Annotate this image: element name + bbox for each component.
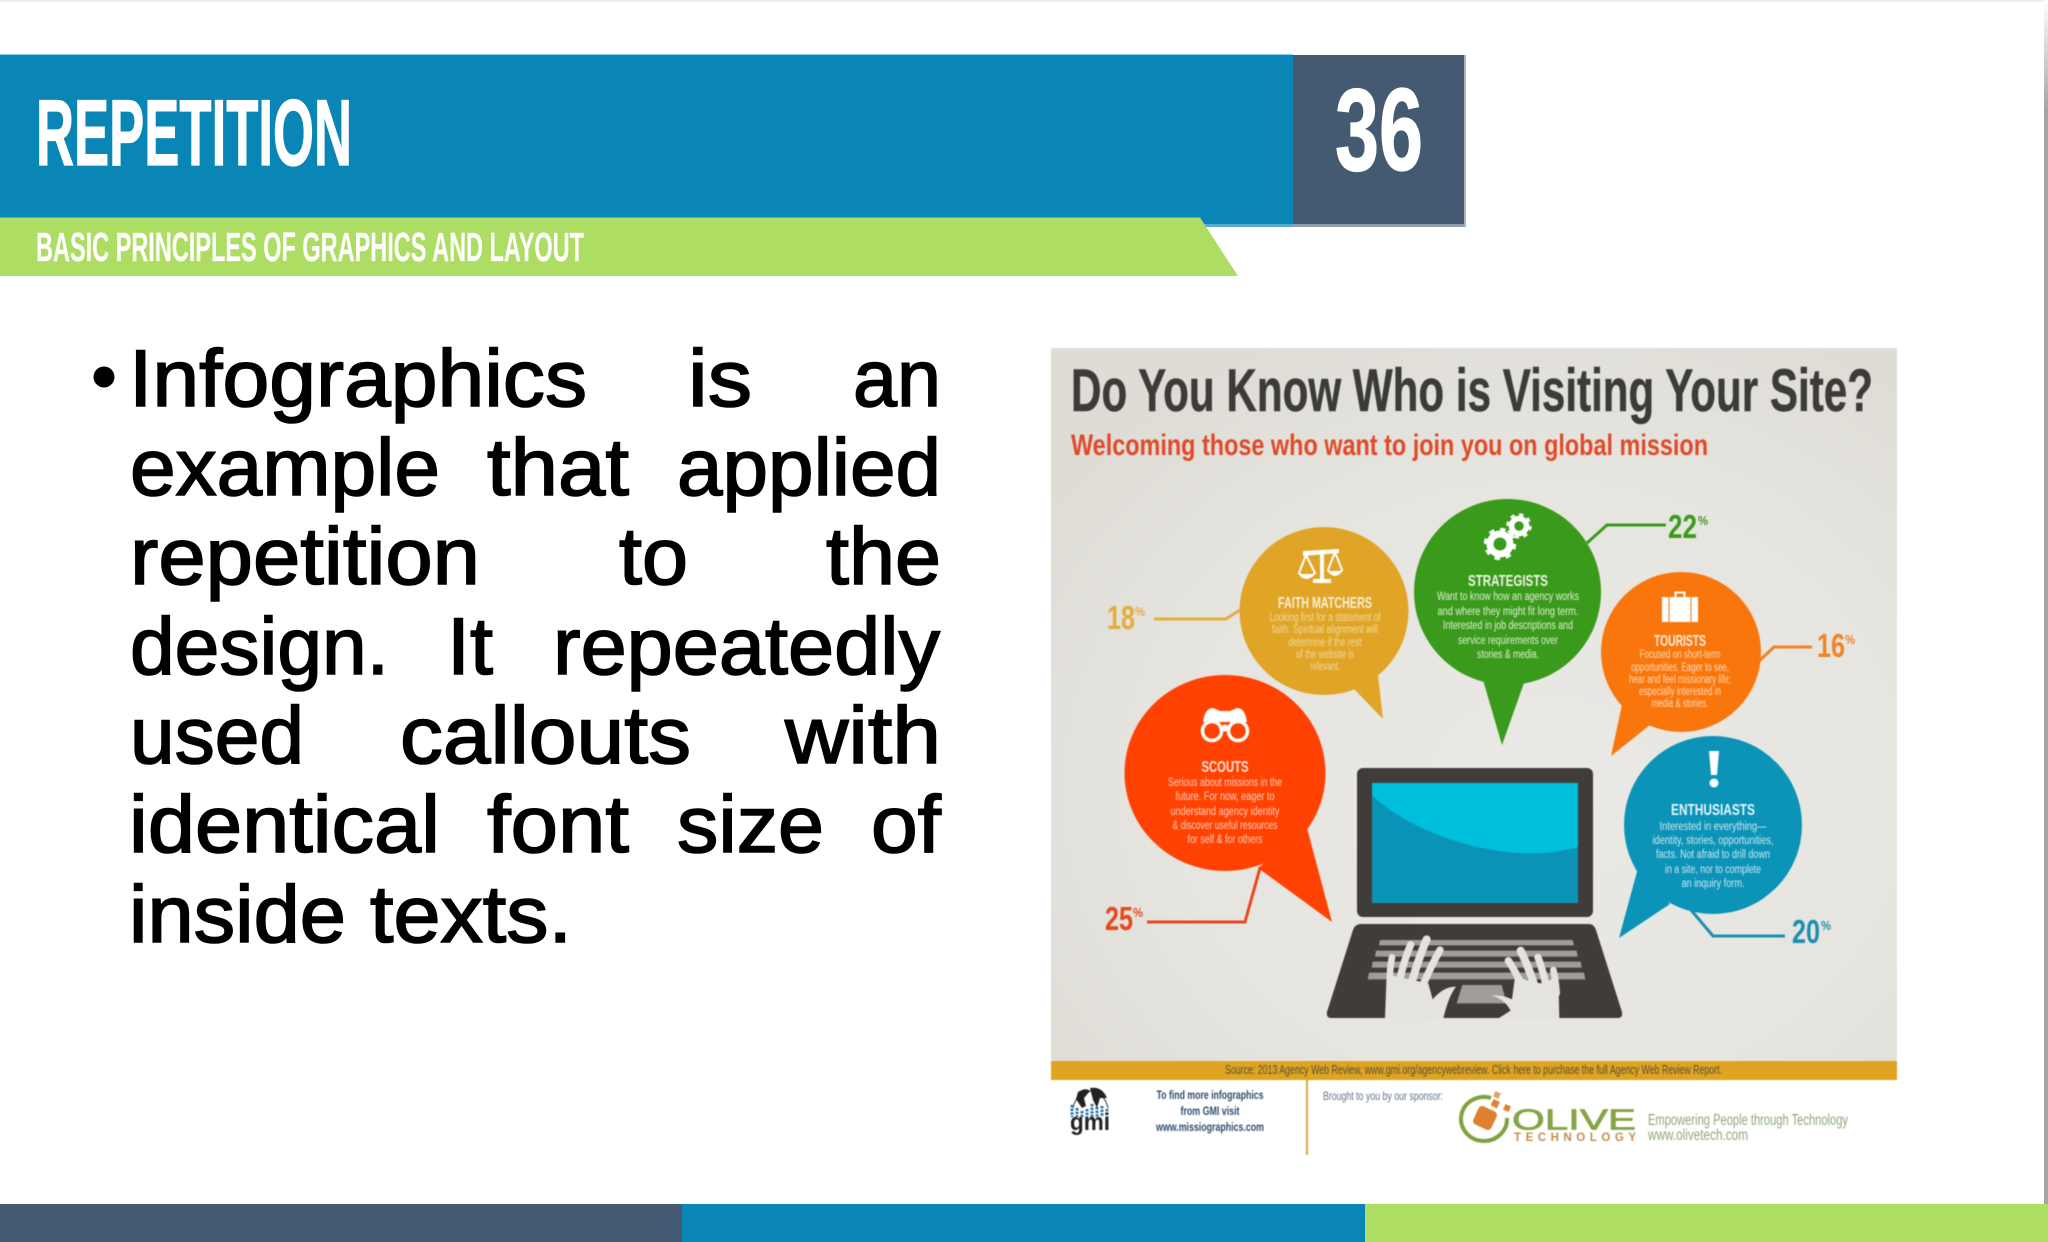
callout: tourists: opportunities. Eager to see, [1631, 662, 1729, 674]
body text bullet: applied [677, 423, 941, 513]
callout: scouts: future. For now, eager to [1176, 791, 1274, 803]
header banner [0, 54, 1466, 227]
body text bullet: It [447, 602, 493, 692]
body text bullet [94, 334, 942, 960]
body text bullet: texts. [370, 870, 572, 960]
logo: gmi: gmi [1070, 1109, 1110, 1136]
callout: scouts: SCOUTS [1202, 759, 1249, 776]
callout: strategists: 22 [1668, 508, 1697, 545]
callout: tourists [1601, 572, 1855, 756]
logo: olive technology: OLIVE [1512, 1104, 1636, 1136]
callout: strategists: stories & media. [1477, 649, 1539, 661]
callout: enthusiasts [1619, 736, 1831, 950]
GMI link text: www.missiographics.com [1155, 1120, 1264, 1134]
subtitle ribbon [0, 218, 1238, 276]
callout: faith matchers: relevant. [1310, 661, 1340, 673]
infographic subtitle: Welcoming those who want to join you on global mission [1071, 429, 1708, 462]
logo: olive technology: TECHNOLOGY [1514, 1132, 1636, 1144]
body text bullet: used [130, 691, 304, 781]
GMI link text: To find more infographics [1156, 1088, 1264, 1102]
callout: faith matchers: faith. Spiritual alignment will [1272, 624, 1378, 636]
callout: scouts: 25 [1105, 900, 1133, 937]
callout: strategists: Want to know how an agency works [1437, 591, 1579, 603]
icon: binoculars [1202, 708, 1248, 740]
body text bullet: repetition [130, 512, 480, 602]
callout: enthusiasts: identity, stories, opportunities, [1652, 835, 1774, 847]
body text bullet: identical [129, 780, 440, 870]
body text bullet: example [130, 423, 440, 513]
callout: enthusiasts: ENTHUSIASTS [1671, 802, 1755, 819]
callout: faith matchers [1107, 527, 1408, 719]
body text bullet: Infographics [129, 334, 587, 424]
logo: gmi [1070, 1088, 1110, 1136]
callout: tourists: Focused on short-term [1640, 649, 1720, 661]
icon: laptop with hands [1327, 768, 1622, 1018]
source band [1051, 1061, 1897, 1080]
callout: strategists [1414, 499, 1708, 745]
callout: enthusiasts: facts. Not afraid to drill down [1656, 849, 1770, 861]
slide number box: 36 [1335, 64, 1423, 195]
callout: faith matchers: determine if the rest [1288, 637, 1362, 649]
callout: tourists: hear and feel missionary life; [1629, 674, 1731, 686]
callout: strategists: and where they might fit long term. [1438, 606, 1578, 618]
icon: suitcase [1662, 592, 1698, 622]
embedded infographic [1051, 348, 1897, 1155]
callout: scouts [1105, 675, 1332, 937]
GMI link text [1155, 1088, 1264, 1134]
callout: strategists: % [1698, 513, 1708, 528]
callout: scouts: % [1133, 905, 1143, 920]
sponsor tagline: www.olivetech.com [1647, 1127, 1748, 1144]
sponsor tagline [1647, 1112, 1848, 1144]
slide number box [1293, 55, 1466, 227]
callout: strategists: STRATEGISTS [1468, 573, 1548, 590]
body text bullet: inside [129, 870, 346, 960]
callout: scouts: & discover useful resources [1172, 820, 1278, 832]
body text bullet: font [487, 780, 629, 870]
body text bullet: an [853, 334, 941, 424]
sponsor tagline: Empowering People through Technology [1648, 1112, 1848, 1129]
callout: scouts: for self & for others [1188, 834, 1263, 846]
body text bullet: design. [130, 602, 389, 692]
callout: enthusiasts: Interested in everything— [1660, 821, 1767, 833]
callout: faith matchers: of the website is [1296, 649, 1354, 661]
body text bullet: is [688, 334, 752, 424]
callout: enthusiasts: in a site, nor to complete [1665, 864, 1761, 876]
callout: faith matchers: FAITH MATCHERS [1278, 595, 1372, 612]
callout: strategists: service requirements over [1458, 635, 1558, 647]
body text bullet: the [826, 512, 941, 602]
callout: scouts: Serious about missions in the [1168, 777, 1282, 789]
callout: faith matchers: 18 [1107, 599, 1135, 636]
callout: faith matchers: % [1135, 604, 1145, 619]
footer colour bars [0, 1204, 2048, 1242]
body text bullet: size [677, 780, 824, 870]
icon: gears [1486, 515, 1530, 558]
callout: tourists: especially interested in [1639, 686, 1721, 698]
body text bullet: with [784, 691, 941, 781]
source band: Source: 2013 Agency Web Review, www.gmi.org/agencywebreview. Click here to purchase the full Agency Web Review Report. [1225, 1063, 1722, 1077]
logo: olive technology [1461, 1091, 1636, 1144]
callout: tourists: % [1845, 632, 1855, 647]
callout: strategists: Interested in job descriptions and [1443, 620, 1573, 632]
callout: tourists: media & stories. [1652, 698, 1708, 710]
body text bullet: callouts [400, 691, 691, 781]
icon: exclamation mark [1709, 751, 1719, 788]
body text bullet: that [487, 423, 629, 513]
callout: enthusiasts: an inquiry form. [1682, 878, 1744, 890]
callout: faith matchers: Looking first for a statement of [1270, 612, 1381, 624]
subtitle ribbon: BASIC PRINCIPLES OF GRAPHICS AND LAYOUT [36, 224, 584, 270]
callout: tourists: 16 [1817, 627, 1845, 664]
body text bullet: of [871, 780, 942, 870]
callout: scouts: understand agency identity [1170, 806, 1280, 818]
icon: scales [1299, 549, 1342, 583]
callout: tourists: TOURISTS [1654, 633, 1706, 650]
body text bullet: to [619, 512, 688, 602]
callout: enthusiasts: % [1821, 918, 1831, 933]
title: REPETITION [36, 80, 352, 185]
body text bullet: repeatedly [553, 602, 941, 692]
GMI link text: from GMI visit [1180, 1104, 1240, 1118]
callout: enthusiasts: 20 [1792, 913, 1820, 950]
sponsor label: Brought to you by our sponsor: [1323, 1089, 1443, 1103]
